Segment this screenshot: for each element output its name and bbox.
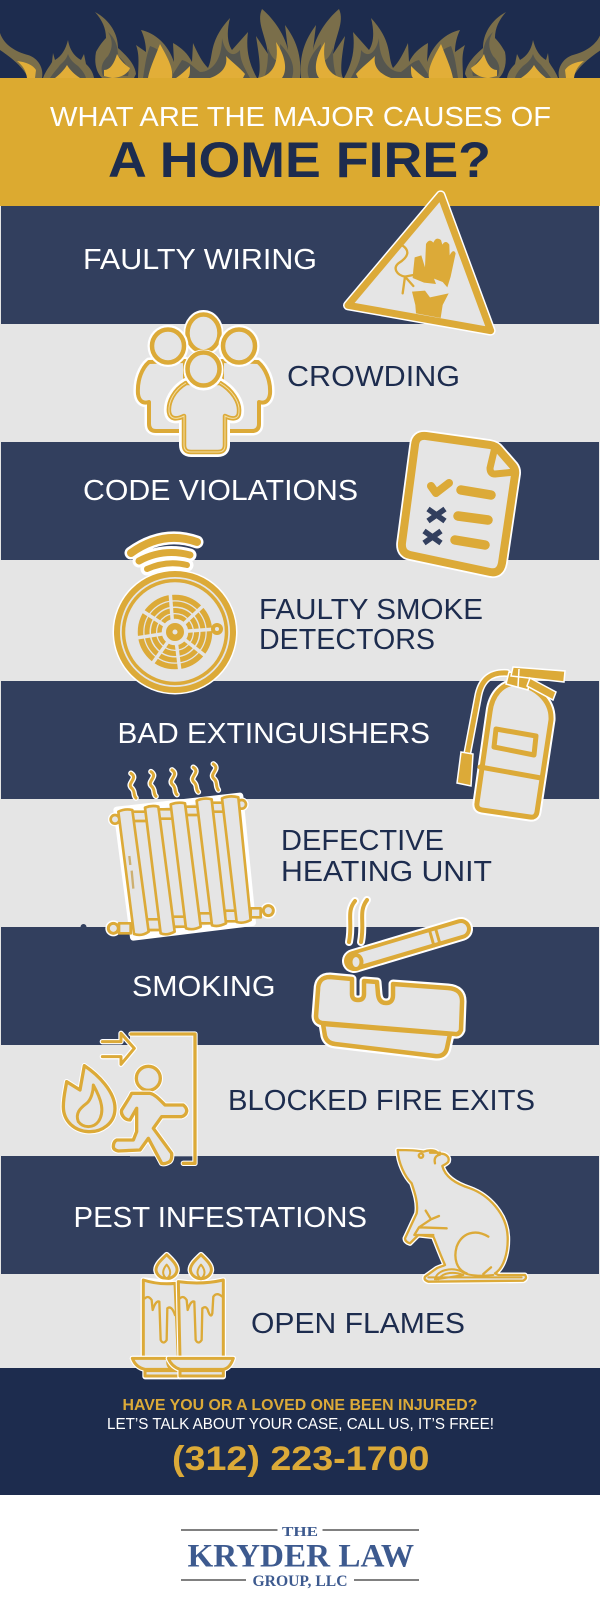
panel: title band (0, 78, 600, 206)
label: smoking: SMOKING (132, 971, 276, 1003)
label: defective heating unit: HEATING UNIT (281, 856, 492, 888)
band: smoking (1, 927, 599, 1045)
footer text: call invitation: LET’S TALK ABOUT YOUR CASE, CALL US, IT’S FREE! (107, 1416, 494, 1433)
band: pest infestations (1, 1156, 599, 1274)
icon: checklist document (402, 436, 515, 572)
icon: fire extinguisher (457, 667, 565, 817)
icon: smoke detector (112, 538, 238, 694)
label: blocked fire exits: BLOCKED FIRE EXITS (228, 1085, 535, 1117)
small navy mark (80, 924, 86, 930)
logo: The Kryder Law Group, LLC: THE (282, 1525, 318, 1540)
title line 2: A HOME FIRE? (108, 132, 491, 188)
label: defective heating unit: DEFECTIVE (281, 825, 444, 857)
icon: person escaping fire through door (63, 1032, 195, 1164)
label: bad extinguishers: BAD EXTINGUISHERS (118, 718, 430, 750)
band: code violations (1, 442, 599, 560)
band: bad extinguishers (1, 681, 599, 799)
footer phone number: (312) 223-1700 (172, 1440, 430, 1478)
icon: rat (398, 1150, 526, 1282)
label: faulty smoke detectors: DETECTORS (259, 624, 435, 656)
icon: crowd of people (138, 312, 270, 452)
label: pest infestations: PEST INFESTATIONS (74, 1202, 367, 1234)
panel: top navy flame band (0, 0, 600, 78)
icon: two candles (132, 1255, 233, 1377)
flames border (0, 9, 600, 78)
logo: The Kryder Law Group, LLC (181, 1525, 419, 1590)
title line 1: WHAT ARE THE MAJOR CAUSES OF (50, 101, 551, 132)
label: crowding: CROWDING (287, 361, 460, 393)
footer text: injured question: HAVE YOU OR A LOVED ONE BEEN INJURED? (122, 1397, 478, 1414)
logo: The Kryder Law Group, LLC: GROUP, LLC (252, 1573, 348, 1590)
band: faulty wiring (1, 206, 599, 324)
label: open flames: OPEN FLAMES (251, 1308, 465, 1340)
label: faulty smoke detectors: FAULTY SMOKE (259, 594, 483, 626)
label: faulty smoke detectors (259, 594, 483, 656)
logo: The Kryder Law Group, LLC: KRYDER LAW (188, 1538, 414, 1574)
label: code violations: CODE VIOLATIONS (83, 475, 358, 507)
label: defective heating unit (281, 825, 492, 888)
icon: electric shock warning triangle (348, 195, 491, 331)
icon: cigarette and ashtray (316, 900, 462, 1056)
label: faulty wiring: FAULTY WIRING (83, 244, 317, 276)
panel: call to action footer (0, 1368, 600, 1495)
icon: radiator (105, 764, 276, 937)
